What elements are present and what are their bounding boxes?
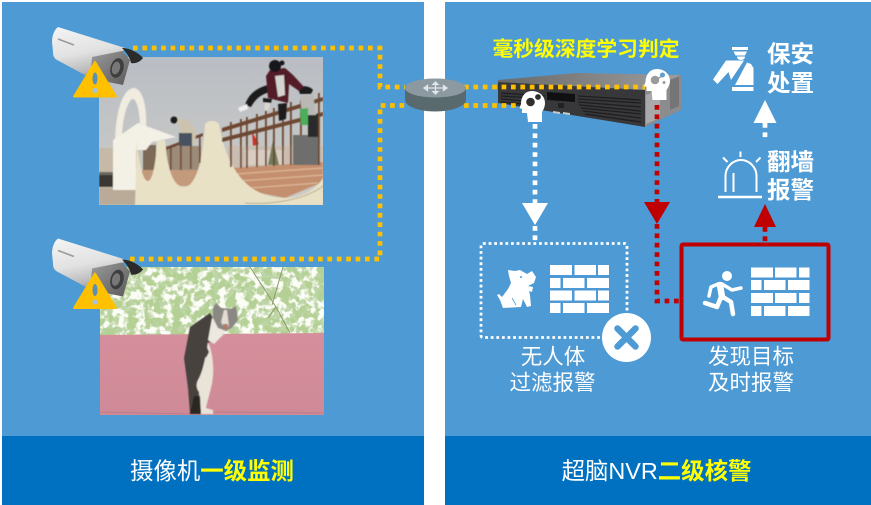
- connector: gold dotted lines from router to NVR: [464, 87, 645, 106]
- arrow: white arrow to security response: [754, 100, 776, 140]
- icon: warning triangle: [74, 62, 116, 96]
- caption: no human alarm filtered: [509, 345, 596, 395]
- footer bar: camera monitoring: [2, 436, 424, 505]
- label: security response: 处置: [767, 70, 814, 96]
- label: wall-climb alarm: [767, 149, 814, 203]
- icon: AI head right: [644, 69, 670, 100]
- label: wall-climb alarm: 翻墙: [767, 149, 814, 175]
- label: wall-climb alarm: 报警: [767, 177, 814, 203]
- icon: bullet camera 1 with warning: [52, 27, 143, 96]
- label: security response: [767, 41, 814, 96]
- heading: millisecond deep learning judgement: 毫秒级深度学习判定: [492, 37, 680, 61]
- icon: bullet camera 2 with warning: [52, 238, 143, 308]
- box: filtered non-human alarm: [481, 244, 627, 338]
- footer text: camera first-level monitoring: 摄像机一级监测: [130, 458, 294, 484]
- icon: dog: [497, 270, 536, 308]
- label: security response: 保安: [767, 41, 814, 67]
- icon: reject cross badge: [602, 313, 651, 362]
- caption: no human alarm filtered: 无人体: [521, 345, 585, 369]
- icon: warning triangle: [74, 274, 116, 308]
- icon: brick wall left: [550, 265, 609, 313]
- icon: network router: [405, 78, 466, 112]
- connector: gold dotted line from camera 2 to router: [130, 106, 405, 259]
- arrow: white dotted arrow to filtered alarm: [522, 124, 548, 241]
- footer bar: NVR verification: [445, 436, 871, 505]
- icon: alarm siren: [718, 152, 762, 197]
- arrow: red dotted arrow to detected target: [644, 105, 681, 301]
- icon: brick wall right: [751, 268, 810, 316]
- caption: target found, timely alarm: [708, 345, 794, 395]
- caption: target found, timely alarm: 及时报警: [708, 371, 794, 395]
- icon: running person: [705, 271, 741, 314]
- icon: NVR recorder: [498, 73, 681, 127]
- box: detected target red frame: [682, 244, 828, 340]
- footer text: NVR second-level verification: 超脑NVR二级核警: [562, 458, 751, 484]
- icon: security guard: [713, 47, 754, 91]
- caption: target found, timely alarm: 发现目标: [708, 345, 794, 369]
- photo: cat climbing on a pink wall: [100, 267, 324, 415]
- panel: NVR second-level verification: [445, 2, 871, 505]
- icon: AI head left: [520, 91, 545, 122]
- arrow: red arrow to wall-climb alarm: [754, 204, 776, 243]
- caption: no human alarm filtered: 过滤报警: [509, 371, 596, 395]
- photo: people climbing over a fence: [99, 57, 323, 205]
- panel: camera first-level monitoring: [2, 2, 424, 505]
- connector: gold dotted line from camera 1 to router: [133, 48, 405, 87]
